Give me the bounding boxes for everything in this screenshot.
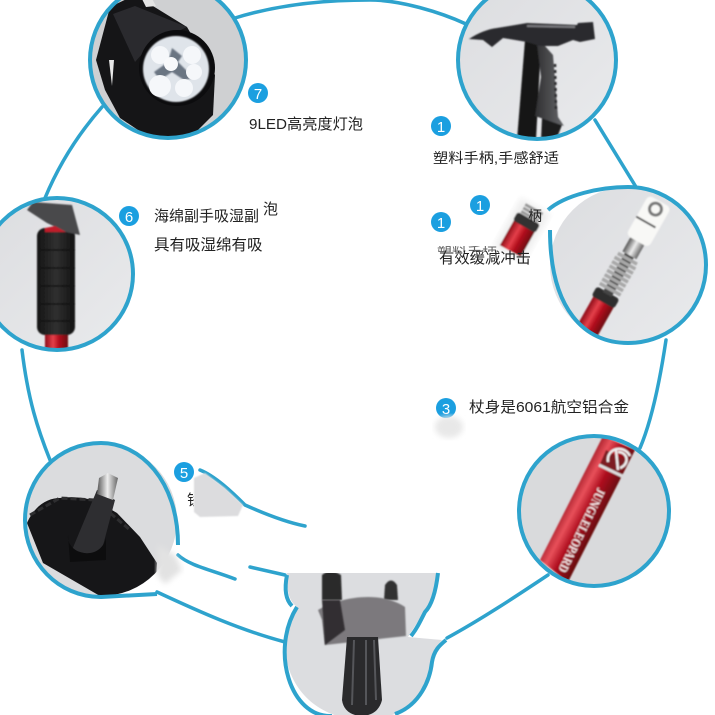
badge 6: [119, 206, 139, 226]
fragment: leftover spring photo: [493, 197, 551, 263]
photo circle: aluminium shaft: [519, 436, 669, 586]
badge 1 handle: [431, 116, 451, 136]
photo circle: LED flashlight: [90, 0, 246, 138]
badge 3: 3: [442, 401, 450, 418]
photo circle: sponge grip: [0, 198, 133, 352]
fragment text: 柄: [528, 208, 542, 224]
label fragment: 泡: [263, 201, 278, 218]
badge 1 handle: 1: [437, 119, 445, 136]
photo circle: wheel tip: [25, 443, 178, 597]
badge 5: 5: [180, 465, 188, 482]
badge 1 duplicate upper: [470, 195, 490, 215]
photo circle: rubber tip: [285, 572, 446, 715]
smudge over badge 3: [435, 416, 463, 438]
badge 1 duplicate lower: [431, 212, 451, 232]
label: 9LED bulb: 9LED高亮度灯泡: [249, 116, 363, 133]
badge 3: [436, 398, 456, 418]
label: shock absorption: 有效缓减冲击: [439, 250, 531, 267]
badge 6: 6: [125, 209, 133, 226]
photo circle: shock-absorbing spring: [548, 187, 706, 350]
grey smudges: [157, 473, 243, 584]
photo circle: plastic handle: [458, 0, 616, 140]
label: aluminium shaft: 杖身是6061航空铝合金: [469, 399, 629, 416]
clipped old label: 塑料手柄: [437, 245, 497, 262]
badge 1 duplicate lower: 1: [437, 215, 445, 232]
brand lettering: JUNGLELEOPARD: [555, 486, 609, 575]
clipped label fragment: 钱: [187, 492, 202, 509]
badge 7: 7: [254, 86, 262, 103]
label: sponge grip line 1: 海绵副手吸湿副: [154, 208, 259, 225]
label: plastic handle: 塑料手柄,手感舒适: [433, 150, 559, 166]
label: sponge grip line 2: 具有吸湿绵有吸湿: [154, 236, 278, 254]
badge 7: [248, 83, 268, 103]
badge 5: [174, 462, 194, 482]
badge 1 duplicate upper: 1: [476, 198, 484, 215]
